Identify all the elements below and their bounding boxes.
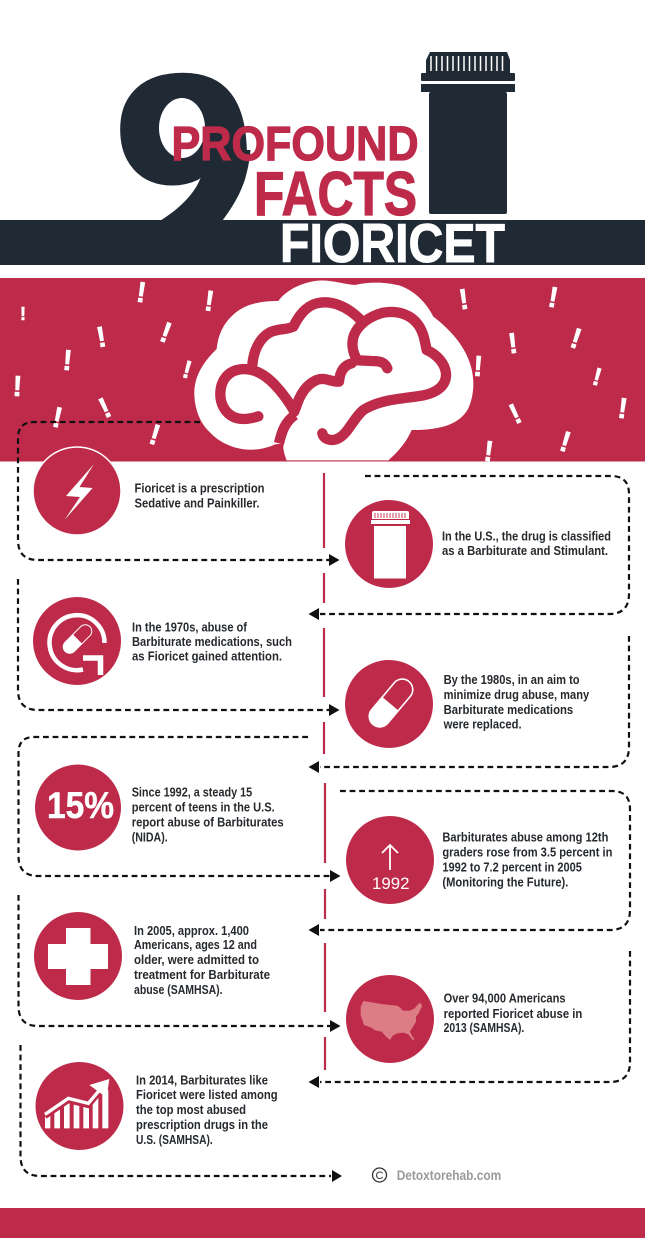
exclamation marks: ! bbox=[506, 328, 520, 361]
fact 7: text: older, were admitted to bbox=[134, 953, 259, 967]
title: FIORICET: FIORICET bbox=[280, 212, 505, 274]
fact 5: text: (NIDA). bbox=[132, 831, 168, 845]
title: PROFOUND: PROFOUND bbox=[172, 118, 418, 171]
dashed arrow connector 8 bbox=[308, 951, 630, 1088]
dashed arrow connector 3 bbox=[18, 579, 340, 716]
timeline: vertical centre line bbox=[324, 473, 325, 1070]
fact 2: bottle icon bbox=[345, 500, 433, 588]
fact 5: text: report abuse of Barbiturates bbox=[132, 816, 284, 830]
fact 6: text bbox=[442, 831, 612, 890]
fact 9: text bbox=[136, 1074, 278, 1147]
panel: red brain banner bbox=[0, 278, 645, 462]
dashed arrow connector 1 bbox=[18, 422, 340, 566]
fact 2: text: In the U.S., the drug is classified bbox=[442, 530, 611, 544]
exclamation marks: ! bbox=[12, 371, 23, 403]
fact 3: pill with arrow icon bbox=[33, 597, 121, 685]
fact 5: text: Since 1992, a steady 15 bbox=[132, 786, 252, 800]
exclamation marks: ! bbox=[202, 285, 216, 318]
exclamation marks: ! bbox=[179, 355, 195, 385]
title: FACTS: FACTS bbox=[254, 160, 417, 229]
fact 1: text: Fioricet is a prescription bbox=[134, 482, 264, 496]
exclamation marks: ! bbox=[61, 345, 74, 377]
exclamation marks: ! bbox=[94, 321, 109, 354]
fact 7: text bbox=[134, 924, 270, 997]
exclamation marks: ! bbox=[589, 363, 605, 392]
fact 7: text: In 2005, approx. 1,400 bbox=[134, 924, 249, 938]
fact 9: rising chart icon bbox=[36, 1062, 124, 1150]
exclamation marks: ! bbox=[49, 402, 65, 435]
fact 2: text bbox=[442, 530, 611, 558]
footer: red band bbox=[0, 1208, 645, 1238]
fact 9: text: the top most abused bbox=[136, 1103, 246, 1117]
exclamation marks: ! bbox=[145, 419, 164, 452]
fact 8: USA map icon bbox=[346, 975, 434, 1063]
fact 7: text: Americans, ages 12 and bbox=[134, 938, 257, 952]
fact 4: text: Barbiturate medications bbox=[444, 703, 573, 717]
fact 6: text: (Monitoring the Future). bbox=[442, 876, 568, 890]
fact 8: text: reported Fioricet abuse in bbox=[444, 1007, 582, 1021]
dashed arrow connector 6 bbox=[308, 791, 630, 936]
fact 6: arrow 1992 icon: 1992 bbox=[372, 874, 410, 893]
fact 6: text: Barbiturates abuse among 12th bbox=[442, 831, 608, 845]
fact 3: text: Barbiturate medications, such bbox=[132, 635, 292, 649]
fact 9: text: In 2014, Barbiturates like bbox=[136, 1074, 268, 1088]
dashed arrow connector 7 bbox=[18, 895, 340, 1032]
dashed arrow connector 5 bbox=[18, 737, 340, 882]
header: big number 9: 9 bbox=[116, 30, 252, 285]
dashed arrow connector 9 bbox=[20, 1045, 342, 1182]
exclamation marks: ! bbox=[94, 392, 116, 425]
fact 5: text bbox=[132, 786, 284, 845]
footer: copyright credit: C bbox=[376, 1170, 384, 1182]
exclamation marks: ! bbox=[472, 351, 484, 383]
dashed arrow connector 2 bbox=[308, 476, 629, 620]
footer: copyright credit: Detoxtorehab.com bbox=[397, 1168, 501, 1183]
fact 4: capsule icon bbox=[345, 660, 433, 748]
fact 1: text: Sedative and Painkiller. bbox=[134, 497, 260, 511]
fact 1: text bbox=[134, 482, 264, 511]
fact 3: text bbox=[132, 621, 292, 664]
exclamation marks: ! bbox=[556, 426, 574, 459]
fact 7: text: treatment for Barbiturate bbox=[134, 968, 270, 982]
exclamation marks: ! bbox=[134, 277, 148, 310]
icon: pill bottle bbox=[421, 52, 515, 214]
fact 8: text: Over 94,000 Americans bbox=[444, 992, 566, 1006]
fact 6: arrow 1992 icon bbox=[346, 816, 434, 904]
fact 6: text: graders rose from 3.5 percent in bbox=[442, 846, 612, 860]
exclamation marks: ! bbox=[616, 393, 630, 426]
fact 9: text: Fioricet were listed among bbox=[136, 1088, 278, 1102]
header: dark band bbox=[0, 220, 645, 265]
fact 4: text: By the 1980s, in an aim to bbox=[444, 673, 580, 687]
fact 5: 15% icon: 15% bbox=[47, 785, 114, 826]
exclamation marks bbox=[12, 277, 630, 469]
fact 5: text: percent of teens in the U.S. bbox=[132, 801, 275, 815]
fact 3: text: In the 1970s, abuse of bbox=[132, 621, 248, 635]
exclamation marks: ! bbox=[457, 284, 471, 317]
fact 2: text: as a Barbiturate and Stimulant. bbox=[442, 544, 608, 558]
fact 9: text: prescription drugs in the bbox=[136, 1118, 268, 1132]
fact 4: text: were replaced. bbox=[443, 718, 522, 732]
fact 3: text: as Fioricet gained attention. bbox=[132, 650, 282, 664]
icon: brain bbox=[194, 281, 473, 460]
fact 4: text: minimize drug abuse, many bbox=[444, 688, 589, 702]
exclamation marks: ! bbox=[546, 282, 561, 315]
exclamation marks: ! bbox=[20, 304, 26, 324]
fact 5: 15% icon bbox=[35, 764, 121, 850]
fact 7: text: abuse (SAMHSA). bbox=[134, 983, 223, 997]
fact 8: text bbox=[444, 992, 582, 1035]
exclamation marks: ! bbox=[482, 436, 495, 469]
dashed arrow connector 4 bbox=[308, 636, 629, 773]
fact 6: text: 1992 to 7.2 percent in 2005 bbox=[442, 861, 582, 875]
fact 8: text: 2013 (SAMHSA). bbox=[444, 1021, 524, 1035]
exclamation marks: ! bbox=[566, 322, 585, 356]
fact 1: lightning bolt icon bbox=[33, 447, 121, 535]
fact 7: medical cross icon bbox=[34, 912, 122, 1000]
fact 4: text bbox=[443, 673, 589, 732]
exclamation marks: ! bbox=[156, 317, 176, 350]
fact 9: text: U.S. (SAMHSA). bbox=[136, 1133, 213, 1147]
exclamation marks: ! bbox=[504, 398, 527, 431]
